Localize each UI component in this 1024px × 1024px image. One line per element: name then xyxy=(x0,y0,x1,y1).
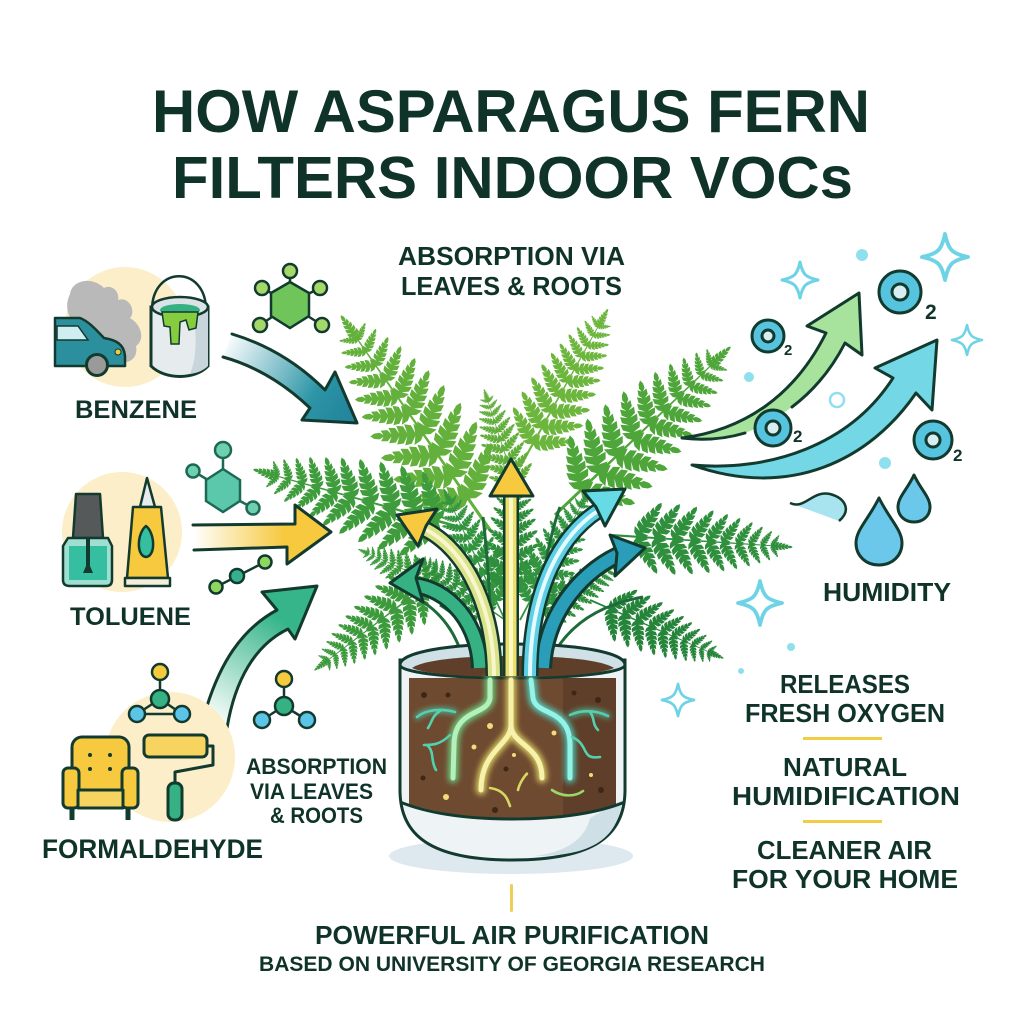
benefit: cleaner air: FOR YOUR HOME xyxy=(732,864,958,894)
benefit: natural humidification: HUMIDIFICATION xyxy=(732,781,960,811)
icon: oxygen molecules: 2 xyxy=(784,342,792,359)
text: absorption via leaves and roots: VIA LEAVES xyxy=(250,779,373,804)
icon: armchair xyxy=(63,737,138,820)
title: FILTERS INDOOR VOCs xyxy=(172,145,853,211)
pot body xyxy=(400,660,625,860)
arrow: yellow centre xyxy=(490,459,533,676)
icon: oxygen molecules: 2 xyxy=(953,446,962,465)
benefits list xyxy=(732,669,960,894)
icon: fern fronds xyxy=(240,283,795,698)
soil specks xyxy=(420,690,604,813)
panel: formaldehyde xyxy=(42,664,263,864)
pot shadow xyxy=(389,838,633,874)
benefit: cleaner air xyxy=(732,835,958,894)
icon background xyxy=(105,692,235,822)
icon: glue tube xyxy=(125,478,170,586)
bottom tick xyxy=(510,884,513,912)
text: absorption via leaves and roots: ABSORPTION xyxy=(246,754,387,779)
arrow: blue right xyxy=(543,535,645,668)
icon: benzene molecule xyxy=(253,264,329,332)
benefit: natural humidification xyxy=(732,752,960,811)
arrow: yellow left xyxy=(397,509,494,676)
roots xyxy=(417,680,608,806)
label: FORMALDEHYDE xyxy=(42,834,263,864)
pot rim xyxy=(400,644,625,678)
arrow: green left xyxy=(390,559,480,668)
title: HOW ASPARAGUS FERN xyxy=(152,78,870,145)
arrow: cyan oxygen xyxy=(692,340,937,478)
arrow: toluene into plant xyxy=(193,505,331,564)
footer caption xyxy=(259,920,765,976)
benefit: cleaner air: CLEANER AIR xyxy=(757,835,932,865)
footer caption: POWERFUL AIR PURIFICATION xyxy=(315,920,709,950)
arrow: formaldehyde into plant xyxy=(207,586,317,728)
arrows rising through the plant xyxy=(390,459,645,676)
text: absorption via leaves and roots xyxy=(246,754,387,828)
label: humidity: HUMIDITY xyxy=(823,577,951,607)
soil xyxy=(409,678,616,818)
footer caption: BASED ON UNIVERSITY OF GEORGIA RESEARCH xyxy=(259,953,765,976)
icon: oxygen molecules: 2 xyxy=(925,301,937,324)
label: TOLUENE xyxy=(70,603,191,631)
benefit: releases fresh oxygen: RELEASES xyxy=(780,669,910,699)
benefit: natural humidification: NATURAL xyxy=(783,752,907,782)
heading: absorption via leaves and roots: LEAVES & ROOTS xyxy=(401,271,622,301)
icon: toluene molecule xyxy=(186,442,260,514)
icon: nail polish xyxy=(63,494,112,586)
arrow: cyan right xyxy=(530,489,625,676)
title xyxy=(152,78,870,211)
label: BENZENE xyxy=(75,396,197,424)
heading: absorption via leaves and roots xyxy=(398,241,625,301)
icon: paint bucket xyxy=(151,276,208,376)
icon: molecule xyxy=(129,664,190,722)
icon: paint roller xyxy=(144,735,213,820)
benefit: releases fresh oxygen: FRESH OXYGEN xyxy=(745,698,945,728)
benefit: releases fresh oxygen xyxy=(745,669,945,728)
icon: oxygen molecules xyxy=(752,271,962,465)
icon: chain molecule xyxy=(210,556,272,594)
icon background xyxy=(62,472,182,592)
panel: benzene xyxy=(55,267,208,424)
icon: humidity drops xyxy=(790,475,930,565)
icon: car xyxy=(55,318,125,376)
pot xyxy=(389,644,633,874)
icon background xyxy=(65,267,185,387)
text: absorption via leaves and roots: & ROOTS xyxy=(270,803,363,828)
arrow: benzene into plant xyxy=(223,334,357,423)
icon: oxygen molecules: 2 xyxy=(793,427,802,446)
decorative sparkles and dots xyxy=(662,234,982,716)
icon: molecule right of formaldehyde xyxy=(254,671,315,728)
panel: toluene xyxy=(62,472,191,631)
arrow: green oxygen xyxy=(682,293,862,439)
heading: absorption via leaves and roots: ABSORPTION VIA xyxy=(398,241,625,271)
icon: smoke xyxy=(67,281,141,362)
